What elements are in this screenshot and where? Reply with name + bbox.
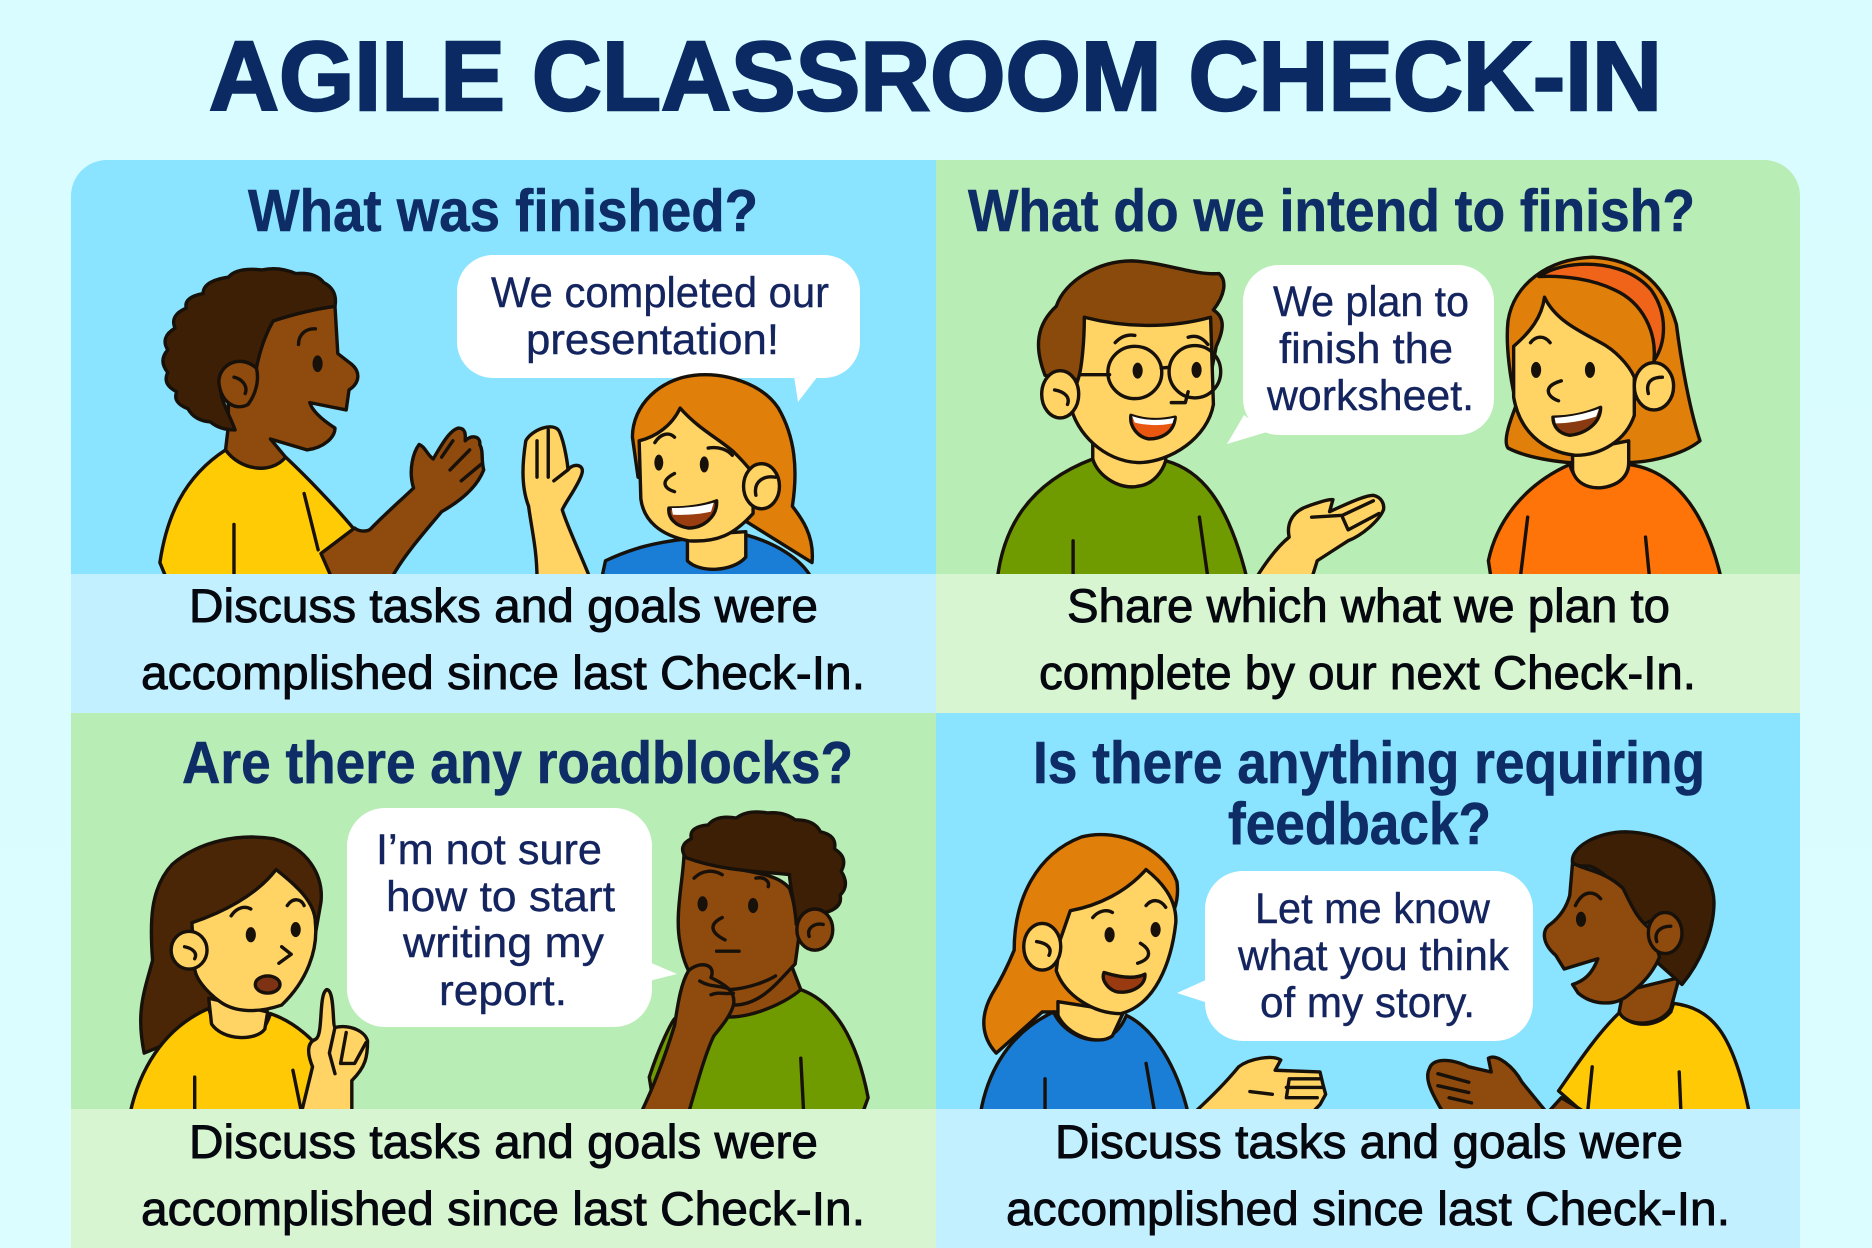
caption: Discuss tasks and goals were bbox=[189, 1115, 818, 1168]
caption: accomplished since last Check-In. bbox=[141, 1182, 865, 1235]
speech bubble: Let me know bbox=[1255, 885, 1491, 933]
panel: what was finished bbox=[71, 160, 936, 713]
character: girl with headband bbox=[1488, 257, 1721, 579]
character: boy with glasses bbox=[997, 261, 1384, 579]
caption: Discuss tasks and goals were bbox=[1055, 1115, 1683, 1168]
caption: accomplished since last Check-In. bbox=[1006, 1182, 1730, 1235]
caption bbox=[936, 574, 1800, 713]
speech bubble bbox=[347, 808, 677, 1027]
speech bubble: I’m not sure bbox=[376, 826, 602, 874]
caption: Share which what we plan to bbox=[1067, 579, 1670, 632]
panel background bbox=[71, 713, 936, 1248]
caption bbox=[71, 1109, 936, 1248]
caption: Discuss tasks and goals were bbox=[189, 579, 818, 632]
character: girl gesturing bbox=[981, 835, 1326, 1113]
heading: What was finished? bbox=[248, 178, 758, 244]
heading: What do we intend to finish? bbox=[968, 178, 1695, 244]
character: girl raising hand bbox=[523, 375, 812, 579]
character: girl with raised finger bbox=[130, 837, 368, 1113]
character: boy gesturing bbox=[1428, 832, 1749, 1113]
panel background bbox=[936, 713, 1800, 1248]
heading: Are there any roadblocks? bbox=[182, 730, 853, 796]
speech bubble: how to start bbox=[386, 873, 615, 921]
character: boy waving bbox=[160, 269, 484, 579]
panel background bbox=[71, 160, 936, 713]
panel: are there any roadblocks bbox=[71, 713, 936, 1248]
speech bubble: finish the bbox=[1279, 325, 1453, 373]
character: thinking boy bbox=[641, 812, 868, 1113]
caption bbox=[71, 574, 936, 713]
speech bubble bbox=[1227, 265, 1494, 444]
heading bbox=[1033, 730, 1705, 857]
title: AGILE CLASSROOM CHECK-IN bbox=[209, 21, 1662, 131]
speech bubble: We completed our bbox=[491, 269, 829, 317]
panel: what do we intend to finish bbox=[936, 160, 1800, 713]
panel background bbox=[936, 160, 1800, 713]
speech bubble: writing my bbox=[402, 919, 605, 967]
speech bubble: what you think bbox=[1237, 932, 1509, 980]
speech bubble: presentation! bbox=[526, 316, 779, 364]
caption: complete by our next Check-In. bbox=[1039, 646, 1696, 699]
speech bubble: We plan to bbox=[1273, 278, 1469, 326]
caption: accomplished since last Check-In. bbox=[141, 646, 865, 699]
panel: anything requiring feedback bbox=[936, 713, 1800, 1248]
heading: feedback? bbox=[1228, 791, 1491, 857]
speech bubble: worksheet. bbox=[1266, 372, 1474, 420]
speech bubble: of my story. bbox=[1260, 979, 1475, 1027]
speech bubble bbox=[1177, 871, 1533, 1041]
heading: Is there anything requiring bbox=[1033, 730, 1705, 796]
speech bubble bbox=[457, 255, 860, 402]
caption bbox=[936, 1109, 1800, 1248]
speech bubble: report. bbox=[439, 967, 567, 1015]
